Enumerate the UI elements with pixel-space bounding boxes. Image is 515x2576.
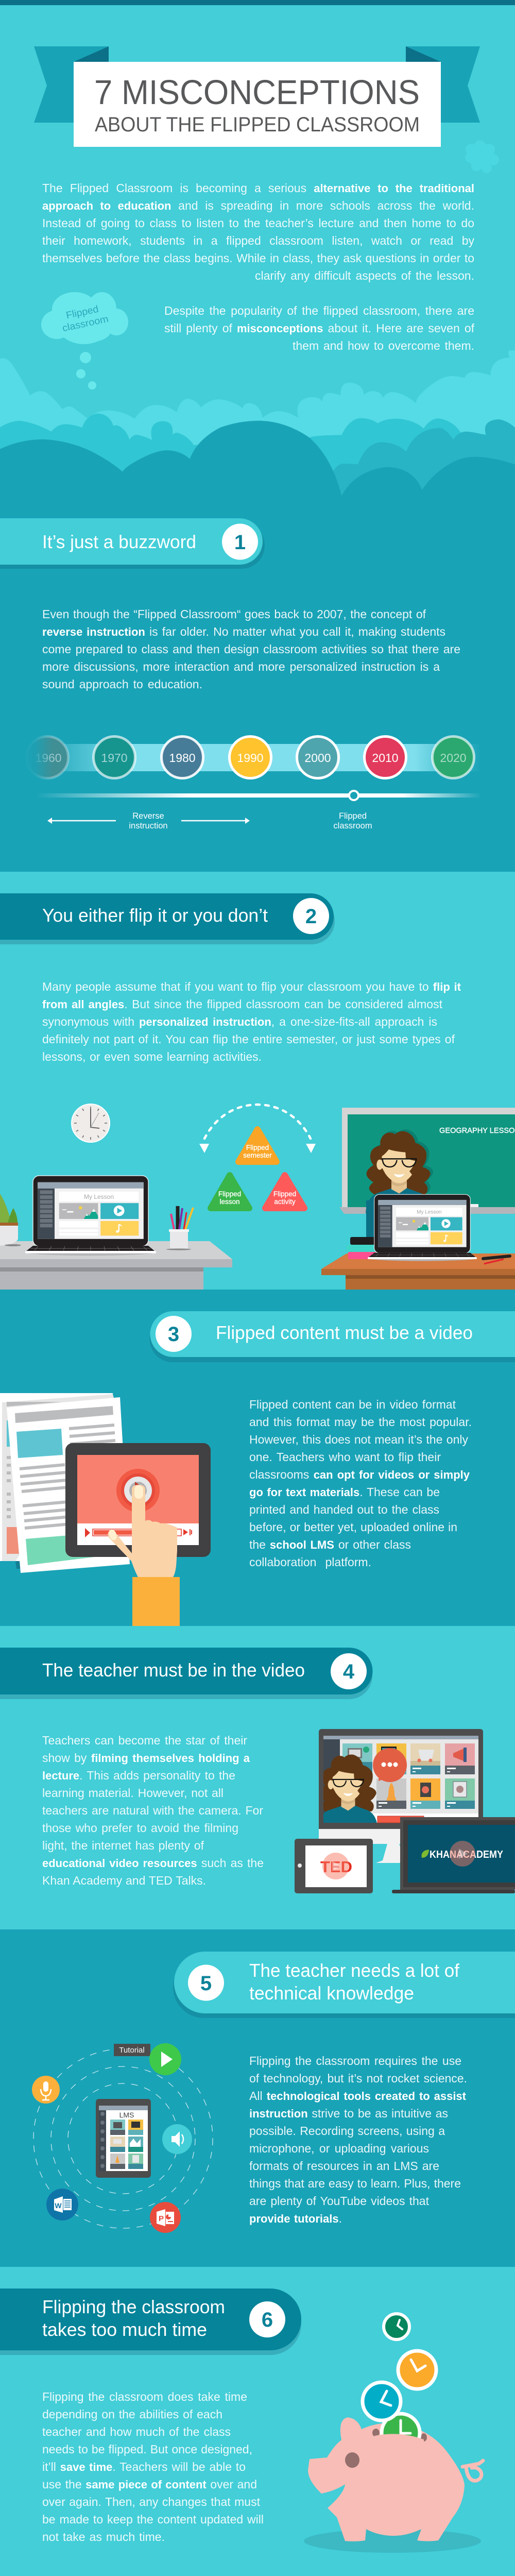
decade circles: 2010 [372, 751, 399, 765]
decade circles: 2000 [304, 751, 331, 765]
text block: misconception 4: show by filming themselves holding a [42, 1751, 250, 1765]
timeline [21, 732, 481, 831]
teacher desk and books [321, 1237, 515, 1290]
LMS tablet: LMS [119, 2111, 134, 2119]
flip arc diagram [199, 1105, 316, 1208]
text block: misconception 3: printed and handed out to the class [249, 1503, 439, 1516]
coin clocks [363, 2314, 436, 2473]
text block: misconception 6: be made to keep the content updated will [42, 2513, 264, 2526]
text block: intro paragraph 1 [42, 181, 474, 282]
heading 6: Flipping the classroom takes too much time: Flipping the classroom [42, 2296, 225, 2317]
decade circles: 2020 [440, 751, 467, 765]
text block: misconception 4: educational video resources such as the [42, 1856, 264, 1870]
title [94, 73, 420, 136]
speech bubble [373, 1748, 407, 1782]
triangle: flipped semester: Flipped [246, 1144, 269, 1151]
text block: misconception 5 [249, 2054, 467, 2225]
text block: misconception 1: come prepared to class and then design classroom activities so that there are [42, 642, 460, 656]
text block: intro paragraph 1: their homework, students in a flipped classroom listen, watch or read by [42, 234, 474, 247]
text block: misconception 1 [42, 607, 460, 691]
icon: wall clock [72, 1104, 110, 1142]
thought cloud: flipped classroom [41, 292, 128, 389]
icon: speaker [162, 2124, 192, 2154]
pig body [308, 2417, 465, 2541]
text block: misconception 5: are plenty of YouTube videos that [249, 2194, 429, 2208]
text block: misconception 6: over again. Then, any changes that must [42, 2495, 260, 2509]
era labels: classroom [333, 821, 372, 831]
cloud landscape [0, 350, 515, 505]
era bar [36, 793, 481, 798]
heading 4: The teacher must be in the video [0, 1648, 373, 1699]
heading 3: Flipped content must be a video: Flipped content must be a video [216, 1322, 473, 1343]
heading 5: The teacher needs a lot of technical knowledge: technical knowledge [249, 1982, 414, 2004]
heading 3: Flipped content must be a video [149, 1311, 515, 1362]
decade circles: 1980 [169, 751, 196, 765]
text block: misconception 6: needs to be flipped. But once designed, [42, 2443, 252, 2456]
text block: misconception 3 [249, 1398, 472, 1569]
heading 4: The teacher must be in the video: The teacher must be in the video [42, 1659, 305, 1681]
icon: Word document: W [55, 2201, 62, 2210]
text block: misconception 2 [42, 980, 461, 1063]
text block: misconception 3: the school LMS or other class [249, 1538, 411, 1551]
text block: misconception 5: All technological tools created to assist [249, 2089, 466, 2103]
heading 1: It's just a buzzword: It’s just a buzzword [42, 531, 196, 552]
heading 1: It's just a buzzword: 1 [234, 531, 246, 554]
text block: misconception 3: and this format may be the most popular. [249, 1415, 472, 1429]
text block: misconception 1: more discussions, more interaction and more personalized instruction is a [42, 660, 440, 673]
triangle: flipped semester: semester [243, 1151, 272, 1159]
section background: misconception 5 [0, 1929, 515, 2267]
text block: misconception 4: lecture. This adds personality to the [42, 1769, 235, 1782]
tablet with TED [295, 1839, 373, 1893]
text block: misconception 4: Teachers can become the star of their [42, 1734, 247, 1747]
heading 5: The teacher needs a lot of technical knowledge: 5 [200, 1972, 212, 1995]
text block: intro paragraph 1: Instead of going to class to listen to the teacher’s lecture and then home to do [42, 216, 474, 230]
text block: misconception 5: provide tutorials. [249, 2212, 342, 2225]
text block: misconception 2: Many people assume that if you want to flip your classroom you have to flip it [42, 980, 461, 993]
text block: misconception 3: before, or better yet, uploaded online in [249, 1520, 457, 1534]
text block: misconception 3: collaboration platform. [249, 1555, 371, 1569]
decade circles: 1970 [101, 751, 128, 765]
era labels [129, 811, 372, 831]
desktop monitor [318, 1729, 483, 1863]
dashed orbits [33, 2049, 213, 2228]
top bar [0, 0, 515, 5]
text block: misconception 1: sound approach to education. [42, 677, 202, 691]
text block: misconception 5: Flipping the classroom requires the use [249, 2054, 461, 2067]
triangle: flipped activity: Flipped [273, 1190, 296, 1198]
era arrows [47, 818, 250, 824]
icon: play [149, 2043, 181, 2075]
heading 6: Flipping the classroom takes too much time [0, 2289, 301, 2355]
text block: intro paragraph 1: The Flipped Classroom is becoming a serious alternative to the traditional [42, 181, 474, 195]
illustration: piggy bank saving time [304, 2314, 483, 2553]
text block: intro paragraph 2: still plenty of misconceptions about it. Here are seven of [164, 321, 474, 335]
heading 5: The teacher needs a lot of technical knowledge [173, 1952, 515, 2018]
text block: misconception 3: go for text materials. These can be [249, 1485, 440, 1499]
laptop with Khan Academy [392, 1817, 515, 1893]
text block: misconception 4: those who prefer to avoid the filming [42, 1821, 238, 1835]
text block: misconception 2: lessons, or even some learning activities. [42, 1050, 262, 1063]
text block: misconception 4: learning material. However, not all [42, 1786, 224, 1800]
icon: PowerPoint document: P [159, 2214, 164, 2223]
icon: microphone [32, 2076, 60, 2104]
teacher in video [323, 1755, 377, 1823]
teacher laptop [368, 1194, 477, 1261]
thought cloud: flipped classroom: Flipped [65, 304, 99, 321]
text block: misconception 6 [42, 2390, 264, 2544]
decade circles [27, 737, 474, 778]
text block: misconception 3: one. Teachers who want to flip their [249, 1450, 441, 1464]
resource cards [342, 1743, 475, 1809]
text block: misconception 5: formats of resources in an LMS are [249, 2159, 439, 2173]
text block: misconception 6: Flipping the classroom does take time [42, 2390, 247, 2403]
title: ABOUT THE FLIPPED CLASSROOM [95, 113, 420, 136]
text block: misconception 2: definitely not part of it. You can flip the entire semester, or just some types of [42, 1032, 455, 1046]
text block: misconception 5: microphone, or uploading various [249, 2142, 429, 2155]
section background: misconception 1 [0, 464, 515, 872]
icon: PowerPoint document [150, 2202, 181, 2233]
text block: misconception 5: instruction strive to be as intuitive as [249, 2107, 448, 2120]
pen cup [166, 1206, 193, 1250]
laptop [25, 1176, 156, 1256]
icon: Word document [46, 2189, 78, 2221]
tutorial label [114, 2044, 150, 2056]
section background: misconception 2 [0, 872, 515, 1290]
era labels: instruction [129, 821, 168, 831]
chalkboard [339, 1108, 515, 1214]
heading 2: You either flip it or you don't: You either flip it or you don’t [42, 905, 268, 926]
text block: misconception 6: teacher and how much of the class [42, 2425, 231, 2438]
era labels: Flipped [339, 811, 367, 821]
front paper [7, 1397, 130, 1573]
back paper [0, 1393, 117, 1569]
tablet with TED: TED [320, 1858, 352, 1876]
text block: misconception 3: classrooms can opt for videos or simply [249, 1468, 470, 1481]
triangle: flipped lesson: lesson [219, 1198, 240, 1206]
text block: misconception 3: Flipped content can be in video format [249, 1398, 456, 1411]
text block: misconception 6: not take as much time. [42, 2530, 165, 2544]
text block: misconception 6: depending on the abilities of each [42, 2408, 222, 2421]
title: 7 MISCONCEPTIONS [94, 73, 420, 112]
text block: intro paragraph 2: them and how to overcome them. [293, 339, 474, 352]
era labels: Reverse [132, 811, 164, 821]
text block: misconception 5: of technology, but it’s not rocket science. [249, 2072, 467, 2085]
section background: misconception 4 [0, 1626, 515, 1929]
text block: misconception 4: teachers are natural with the camera. For [42, 1804, 263, 1817]
tablet [65, 1443, 211, 1557]
triangle: flipped lesson: Flipped [218, 1190, 241, 1198]
text block: intro paragraph 1: clarify any difficult aspects of the lesson. [255, 269, 474, 282]
hand [108, 1485, 180, 1626]
laptop with Khan Academy: KHANACADEMY [430, 1849, 504, 1860]
text block: misconception 4 [42, 1734, 264, 1887]
text block: misconception 6: it’ll save time. Teachers will be able to [42, 2460, 246, 2473]
decorative puff cloud [465, 140, 499, 173]
heading 5: The teacher needs a lot of technical knowledge: The teacher needs a lot of [249, 1960, 460, 1981]
text block: misconception 4: light, the internet has plenty of [42, 1839, 204, 1852]
illustration: LMS with tools orbiting [32, 2043, 213, 2233]
text block: misconception 3: However, this does not mean it’s the only [249, 1433, 468, 1446]
text block: intro paragraph 2 [164, 304, 475, 352]
text block: intro paragraph 1: approach to education and is spreading in more schools across the world. [42, 199, 474, 212]
section background: misconception 6 [0, 2267, 515, 2576]
heading 6: Flipping the classroom takes too much time: takes too much time [42, 2319, 207, 2340]
text block: misconception 2: from all angles. But since the flipped classroom can be considered almost [42, 997, 442, 1011]
text block: misconception 2: synonymous with personalized instruction, a one-size-fits-all approach is [42, 1015, 437, 1028]
illustration: papers, tablet and hand [0, 1393, 211, 1626]
text block: misconception 1: Even though the “Flipped Classroom“ goes back to 2007, the concept of [42, 607, 426, 621]
decade circles: 1990 [237, 751, 264, 765]
illustration: desktop, tablet and laptop with video resources [295, 1729, 515, 1893]
plant [0, 1194, 21, 1246]
LMS tablet [96, 2099, 151, 2178]
text block: misconception 5: possible. Recording screens, using a [249, 2124, 445, 2138]
heading 2: You either flip it or you don't: 2 [305, 905, 317, 928]
pig tail [462, 2461, 483, 2481]
text block: misconception 6: use the same piece of content over and [42, 2478, 257, 2491]
heading 2: You either flip it or you don't [0, 893, 335, 944]
triangle: flipped activity [265, 1175, 304, 1208]
section background: misconception 3 [0, 1290, 515, 1626]
text block: misconception 1: reverse instruction is far older. No matter what you call it, making students [42, 625, 445, 638]
triangle: flipped lesson [211, 1175, 249, 1208]
teacher [366, 1129, 433, 1238]
tutorial label: Tutorial [119, 2046, 145, 2055]
heading 6: Flipping the classroom takes too much time: 6 [262, 2309, 273, 2331]
section background: intro [0, 5, 515, 469]
title ribbon [34, 46, 480, 147]
text block: misconception 5: things that are easy to learn. Plus, there [249, 2177, 461, 2190]
heading 3: Flipped content must be a video: 3 [168, 1323, 179, 1346]
decade circles: 1960 [35, 751, 62, 765]
triangle: flipped activity: activity [274, 1198, 296, 1206]
thought cloud: flipped classroom: classroom [61, 314, 110, 334]
text block: intro paragraph 1: themselves before the class begins. While in class, they ask questions in order to [42, 251, 474, 265]
text block: misconception 4: Khan Academy and TED Talks. [42, 1874, 206, 1887]
student desk [0, 1176, 232, 1290]
text block: intro paragraph 2: Despite the popularity of the flipped classroom, there are [164, 304, 474, 317]
heading 4: The teacher must be in the video: 4 [343, 1660, 355, 1683]
heading 1: It's just a buzzword [0, 518, 265, 569]
triangle: flipped semester [238, 1129, 277, 1162]
